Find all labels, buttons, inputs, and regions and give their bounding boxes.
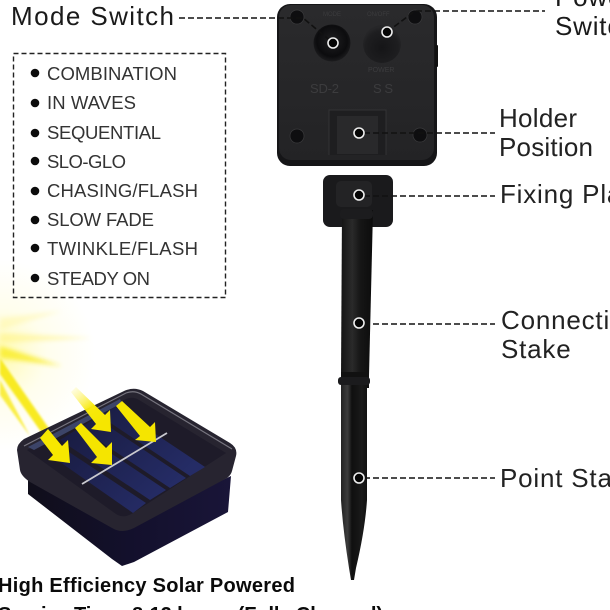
power button — [363, 25, 401, 63]
label: holder position: Position — [499, 132, 593, 162]
box markings: SS — [373, 81, 393, 96]
caption — [0, 575, 383, 610]
box markings: SD-2 — [310, 81, 339, 96]
caption: High Efficiency Solar Powered — [0, 575, 295, 597]
label: connection stake: Stake — [501, 334, 572, 364]
box markings — [310, 12, 394, 96]
arrow: yellow top — [71, 387, 111, 432]
box body — [277, 4, 437, 166]
label: mode switch: Mode Switch — [11, 1, 174, 31]
callout markers — [328, 27, 392, 483]
panel: solar cells — [100, 407, 205, 476]
mode names — [47, 63, 198, 289]
mode names: SLOW FADE — [47, 209, 154, 230]
mode names: TWINKLE/FLASH — [47, 238, 198, 259]
bullets — [31, 69, 39, 282]
holder slot — [329, 110, 386, 155]
panel: upper reflection — [28, 399, 122, 450]
screws — [290, 10, 427, 143]
mode names: CHASING/FLASH — [47, 180, 198, 201]
box markings: ON/OFF — [367, 12, 390, 18]
mode names: COMBINATION — [47, 63, 177, 84]
panel: lighting modes list — [14, 54, 226, 298]
panel: lower casing — [28, 476, 231, 566]
side switch — [435, 45, 438, 67]
sun rays — [0, 260, 95, 450]
mode names: STEADY ON — [47, 268, 150, 289]
power control box — [277, 4, 438, 166]
box markings: POWER — [368, 67, 394, 74]
arrow: yellow middle — [75, 423, 112, 465]
solar panel — [17, 387, 236, 566]
connection stake — [336, 181, 373, 388]
label: connection stake — [501, 305, 610, 364]
label: holder position: Holder — [499, 103, 577, 133]
arrow: yellow right — [116, 401, 156, 442]
mode names: SLO-GLO — [47, 151, 126, 172]
box markings: MODE — [323, 12, 341, 18]
panel: silver wire — [82, 433, 167, 484]
mode button — [314, 24, 350, 62]
callout lines — [179, 11, 545, 478]
point stake — [341, 385, 367, 580]
mode names: IN WAVES — [47, 92, 136, 113]
arrow: yellow left — [40, 429, 70, 463]
mode names: SEQUENTIAL — [47, 122, 161, 143]
panel: inner tray — [27, 398, 226, 516]
label: holder position — [499, 103, 593, 162]
panel: upper rim — [17, 389, 236, 531]
fixing plate — [323, 175, 393, 227]
